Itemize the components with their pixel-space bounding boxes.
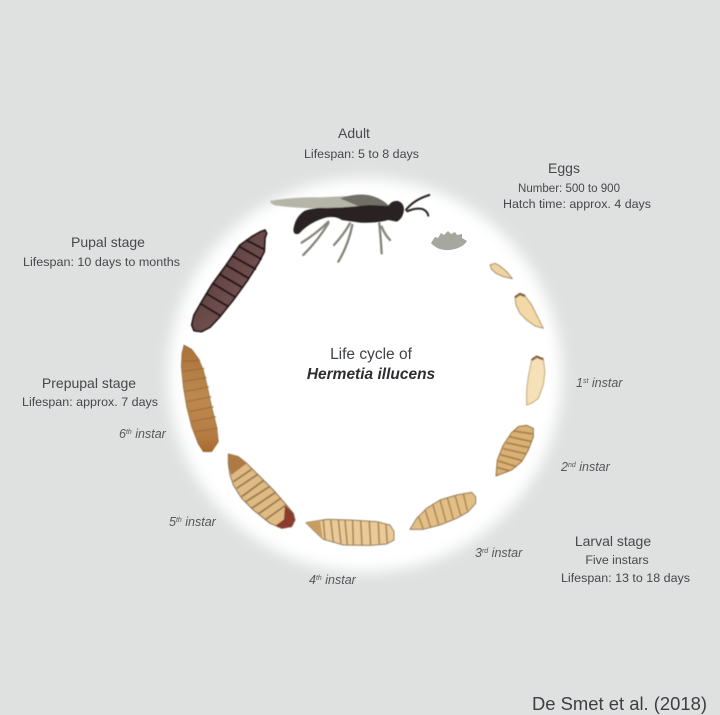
larva: newly hatched <box>490 263 512 279</box>
label: eggs: Number: 500 to 900 <box>518 181 620 195</box>
label: 2nd instar: 2 <box>561 460 568 474</box>
icon: adult fly <box>270 194 429 262</box>
label: pupal stage <box>23 234 180 269</box>
larvae early: egg hatchling, early first and first instar, second instar <box>490 263 545 476</box>
white circle <box>168 178 562 572</box>
larva: fifth instar <box>228 454 295 528</box>
label: 1st instar: st <box>583 378 589 385</box>
label: larval stage <box>561 533 690 585</box>
label: pupal stage: Pupal stage <box>71 234 145 250</box>
pupa <box>192 230 267 332</box>
citation: De Smet et al. (2018) <box>532 694 707 714</box>
larvae late: third, fourth and fifth instars <box>228 454 476 545</box>
label: pupal stage: Lifespan: 10 days to months <box>23 255 180 269</box>
label: adult <box>304 125 419 161</box>
label: eggs <box>503 160 651 211</box>
label: adult: Lifespan: 5 to 8 days <box>304 147 419 161</box>
label: center title <box>307 346 436 383</box>
label: eggs: Eggs <box>548 160 580 176</box>
label: 3rd instar: rd <box>482 548 489 555</box>
label: larval stage: Lifespan: 13 to 18 days <box>561 571 690 585</box>
label: 2nd instar: instar <box>576 460 611 474</box>
larva: third instar <box>410 492 476 529</box>
pupa and prepupa <box>181 230 267 452</box>
label: 1st instar: 1 <box>576 376 583 390</box>
label: larval stage: Five instars <box>585 553 649 567</box>
prepupa <box>181 345 218 452</box>
label: 1st instar: instar <box>588 376 623 390</box>
fly legs <box>302 222 390 262</box>
larva: first instar <box>527 357 545 405</box>
icon: eggs cluster <box>431 231 467 250</box>
label: 5th instar: th <box>176 517 182 524</box>
label: prepupal stage <box>22 375 158 409</box>
label: 2nd instar: nd <box>568 462 577 469</box>
label: 3rd instar: 3 <box>475 546 482 560</box>
label: eggs: Hatch time: approx. 4 days <box>503 197 651 211</box>
label: 4th instar: 4 <box>309 573 316 587</box>
fly wing <box>270 196 363 209</box>
label: larval stage: Larval stage <box>575 533 651 549</box>
label: 6th instar: th <box>126 429 132 436</box>
larva head caps <box>515 294 543 360</box>
larva: early first instar <box>515 294 543 328</box>
larva: fourth instar <box>306 519 394 545</box>
fly antennae <box>406 195 429 216</box>
label: 6th instar: instar <box>132 427 167 441</box>
label: 6th instar: 6 <box>119 427 126 441</box>
label: 3rd instar: instar <box>488 546 523 560</box>
label: center title: Life cycle of <box>330 346 413 363</box>
label: 4th instar: instar <box>322 573 357 587</box>
larva: second instar <box>496 425 533 476</box>
label: 4th instar: th <box>316 575 322 582</box>
label: prepupal stage: Prepupal stage <box>42 375 136 391</box>
fly wing base <box>340 194 389 208</box>
label: adult: Adult <box>338 125 370 141</box>
label: 5th instar: instar <box>182 515 217 529</box>
species name: Hermetia illucens <box>307 366 436 383</box>
fly body <box>293 201 404 234</box>
label: 5th instar: 5 <box>169 515 176 529</box>
label: prepupal stage: Lifespan: approx. 7 days <box>22 395 158 409</box>
